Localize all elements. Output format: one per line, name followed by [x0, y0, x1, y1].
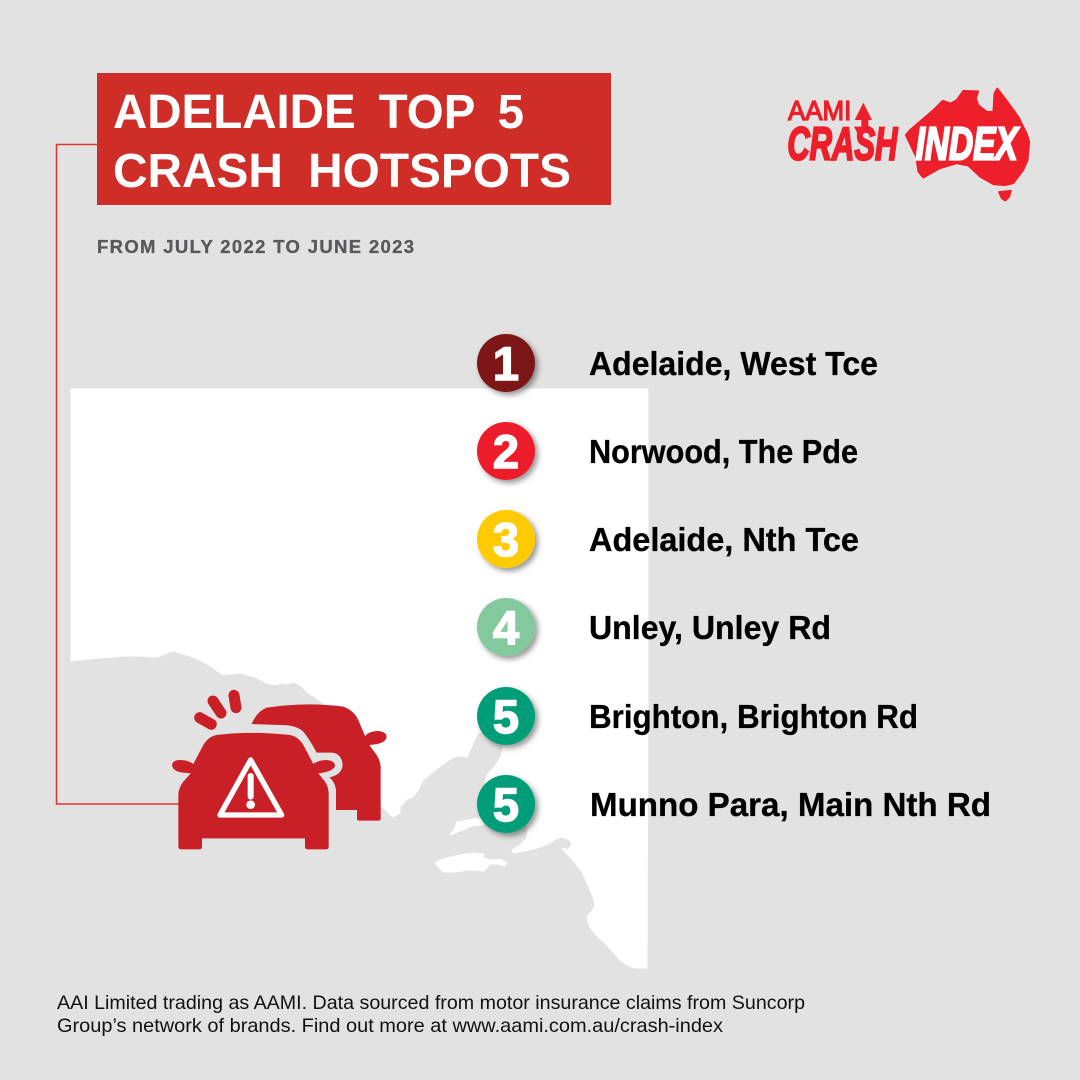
rank 3	[477, 510, 859, 568]
rank 5: Brighton	[477, 687, 918, 745]
logo word AAMI: AAMI	[788, 95, 851, 126]
title banner	[97, 73, 611, 205]
rank 1: Adelaide, West Tce	[589, 345, 878, 382]
rank 4: 4	[493, 601, 519, 654]
rank 2: Norwood, The Pde	[589, 433, 858, 470]
icon: crashed cars with warning	[172, 695, 387, 849]
logo word INDEX: INDEX	[916, 117, 1020, 169]
logo: AAMI Crash Index	[787, 88, 1029, 201]
rank 3: Adelaide, Nth Tce	[589, 521, 859, 558]
rank 5: Brighton: 5	[493, 690, 519, 743]
connector line	[56, 144, 190, 804]
footer source note: AAI Limited trading as AAMI. Data sourced from motor insurance claims from Suncorp	[57, 992, 805, 1014]
rank 1	[477, 334, 878, 392]
logo arrow	[854, 103, 872, 138]
rank 5: Munno Para	[477, 775, 991, 833]
rank 4	[477, 598, 831, 656]
rear car	[252, 704, 387, 821]
rank 5: Munno Para: 5	[493, 778, 519, 831]
rank 4: Unley, Unley Rd	[589, 609, 831, 646]
rank 2	[477, 422, 858, 480]
logo word CRASH: CRASH	[787, 117, 898, 169]
rank 2: 2	[493, 425, 519, 478]
logo map of Australia	[906, 88, 1029, 201]
rank 3: 3	[493, 513, 519, 566]
impact marks	[200, 695, 236, 724]
front car	[172, 733, 335, 849]
title banner: CRASH HOTSPOTS	[113, 145, 571, 198]
title banner: ADELAIDE TOP 5	[113, 86, 524, 139]
rank 5: Brighton: Brighton, Brighton Rd	[589, 698, 918, 735]
ranked hotspots list	[477, 334, 991, 833]
subtitle: date range: FROM JULY 2022 TO JUNE 2023	[97, 236, 414, 257]
footer source note: Group’s network of brands. Find out more at www.aami.com.au/crash-index	[57, 1015, 723, 1037]
rank 5: Munno Para: Munno Para, Main Nth Rd	[590, 786, 991, 823]
map: South Australia	[71, 389, 648, 968]
footer source note	[57, 992, 805, 1037]
warning triangle	[220, 760, 282, 815]
rank 1: 1	[493, 337, 519, 390]
